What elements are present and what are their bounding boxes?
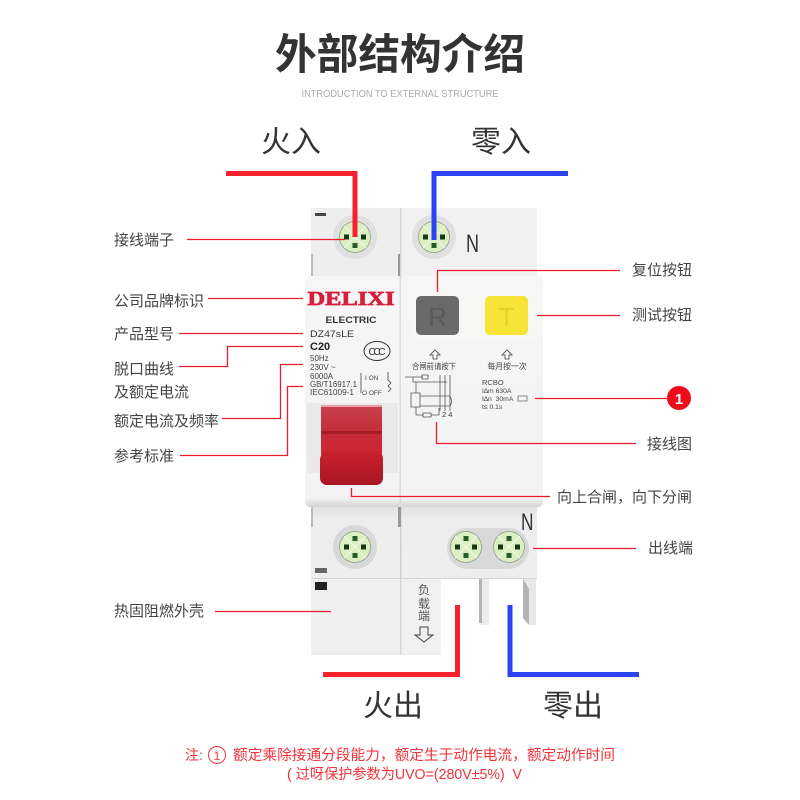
upper terminal block xyxy=(311,208,537,280)
button hints xyxy=(412,350,526,371)
logo: DELIXI ELECTRIC xyxy=(308,288,395,325)
lower terminal block: N xyxy=(521,509,533,536)
circuit breaker body xyxy=(305,208,543,655)
wire: live in xyxy=(226,174,355,237)
main housing xyxy=(305,276,543,507)
model and ratings text: 230V ~ xyxy=(310,363,336,372)
lower shell xyxy=(311,578,441,655)
reset button R: R xyxy=(428,302,447,332)
model and ratings text: 50Hz xyxy=(310,354,329,363)
callout: trip curve: 及额定电流 xyxy=(114,384,189,401)
RCBO specs: I∆n 30mA xyxy=(482,396,514,403)
callout: reference standard xyxy=(114,386,303,465)
callout: reference standard: 参考标准 xyxy=(114,448,174,465)
RCBO specs: I∆m 630A xyxy=(482,388,512,395)
callout: rated current and frequency xyxy=(114,364,303,430)
CCC mark: CCC xyxy=(368,347,386,358)
model and ratings text: IEC61009-1 xyxy=(310,388,355,397)
footnote: 额定乘除接通分段能力，额定生于动作电流，额定动作时间 xyxy=(233,747,615,764)
wire: neutral out xyxy=(510,605,639,674)
model and ratings text: 6000A xyxy=(310,372,334,381)
footnote: 注: xyxy=(185,747,203,763)
model and ratings text: C20 xyxy=(310,341,330,353)
logo: DELIXI ELECTRIC: DELIXI xyxy=(308,288,395,310)
callout: trip curve: 脱口曲线 xyxy=(114,361,174,378)
label: live out: 火出 xyxy=(363,690,423,723)
reset button R xyxy=(416,296,459,335)
output prongs xyxy=(479,579,536,625)
callout: trip curve xyxy=(114,346,303,401)
red switch handle xyxy=(307,403,398,485)
wire: neutral in xyxy=(434,174,568,240)
wiring diagram xyxy=(405,375,452,419)
footnote: ( 过呀保护参数为UVO=(280V±5%) V xyxy=(287,766,522,783)
button hints: 合闸前请按下 xyxy=(412,361,456,371)
callout: brand logo: 公司品牌标识 xyxy=(114,293,204,310)
callout: wiring diagram: 接线图 xyxy=(647,436,692,453)
callout: wiring diagram xyxy=(436,422,692,453)
label: neutral out: 零出 xyxy=(543,690,603,723)
callout: reset button: 复位按钮 xyxy=(632,261,692,279)
subtitle: INTRODUCTION TO EXTERNAL STRUCTURE xyxy=(302,88,498,100)
footnote: 1 xyxy=(214,749,221,763)
callout: rated current and frequency: 额定电流及频率 xyxy=(114,413,219,430)
RCBO specs: t≤ 0.1s xyxy=(482,404,503,411)
callout: note marker 1: 1 xyxy=(675,391,683,408)
button tray xyxy=(411,292,543,340)
model and ratings text: O OFF xyxy=(362,390,382,397)
RCBO specs xyxy=(482,378,527,411)
callout: switch direction xyxy=(352,488,692,506)
model and ratings text: DZ47sLE xyxy=(310,329,354,340)
callout: switch direction: 向上合闸，向下分闸 xyxy=(557,489,692,506)
logo: DELIXI ELECTRIC: ELECTRIC xyxy=(326,315,377,325)
callout: output terminal: 出线端 xyxy=(648,540,693,557)
test button T xyxy=(485,296,528,335)
lower shell: 端 xyxy=(418,609,430,623)
label: neutral in: 零入 xyxy=(471,126,531,159)
model and ratings text: I ON xyxy=(365,375,379,382)
upper terminal block: N xyxy=(466,229,479,258)
wire: live out xyxy=(323,605,458,674)
callout: reset button xyxy=(438,261,692,292)
footnote xyxy=(185,746,615,783)
lower terminal block xyxy=(311,504,537,590)
model and ratings text: GB/T16917.1 xyxy=(310,380,358,389)
wiring diagram: 2 4 xyxy=(442,410,452,419)
callout: terminal: 接线端子 xyxy=(114,232,174,249)
lower shell: 载 xyxy=(418,597,430,611)
lower shell: 负 xyxy=(418,583,430,597)
test button T: T xyxy=(499,302,515,332)
CCC mark xyxy=(364,342,390,360)
button hints: 每月按一次 xyxy=(488,361,526,371)
callout: flame-retardant shell: 热固阻燃外壳 xyxy=(114,602,204,620)
model and ratings text xyxy=(310,329,391,397)
label: live in: 火入 xyxy=(261,126,321,159)
RCBO specs: RCBO xyxy=(482,378,504,387)
title: 外部结构介绍 xyxy=(275,31,525,78)
callout: test button: 测试按钮 xyxy=(632,307,692,324)
callout: note marker 1 xyxy=(535,386,691,410)
callout: model: 产品型号 xyxy=(114,326,174,343)
